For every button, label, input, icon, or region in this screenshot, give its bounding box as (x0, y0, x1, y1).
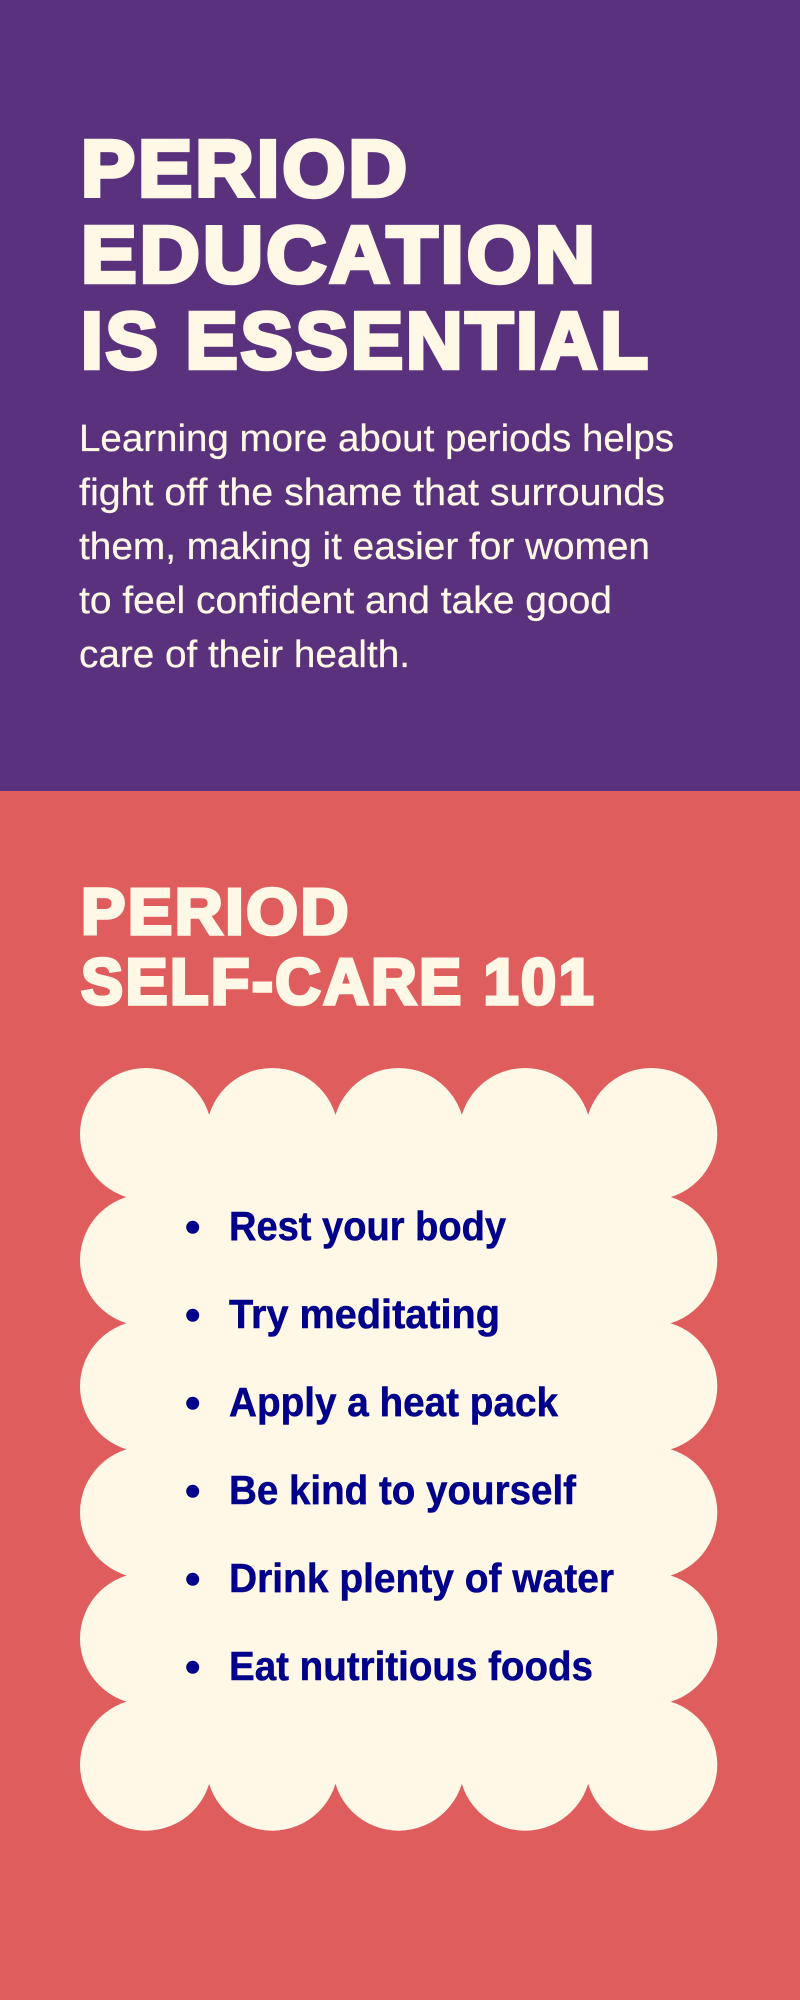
intro paragraph: Learning more about periods helps (79, 418, 674, 460)
list item: try meditating: Try meditating (229, 1291, 500, 1337)
list item: eat nutritious foods: Eat nutritious foods (229, 1643, 593, 1689)
intro paragraph (79, 418, 674, 676)
panel: coral self-care background (0, 791, 800, 2000)
intro paragraph: care of their health. (79, 634, 410, 676)
title: IS ESSENTIAL (81, 296, 651, 385)
section heading: period self-care 101: PERIOD (81, 875, 351, 948)
title: EDUCATION (81, 210, 598, 299)
list item: be kind to yourself: Be kind to yourself (229, 1467, 576, 1513)
intro paragraph: them, making it easier for women (79, 526, 650, 568)
intro paragraph: fight off the shame that surrounds (79, 472, 665, 514)
list item: apply a heat pack: Apply a heat pack (229, 1379, 558, 1425)
title: PERIOD (81, 124, 410, 213)
panel: scalloped cream card (80, 1068, 717, 1831)
list item: rest your body: Rest your body (229, 1203, 506, 1249)
section heading: period self-care 101 (81, 875, 596, 1018)
list item: drink plenty of water: Drink plenty of water (229, 1555, 614, 1601)
title (81, 124, 651, 385)
self-care bullet list (186, 1203, 614, 1689)
intro paragraph: to feel confident and take good (79, 580, 612, 622)
panel: purple intro background (0, 0, 800, 791)
section heading: period self-care 101: SELF-CARE 101 (81, 945, 596, 1018)
